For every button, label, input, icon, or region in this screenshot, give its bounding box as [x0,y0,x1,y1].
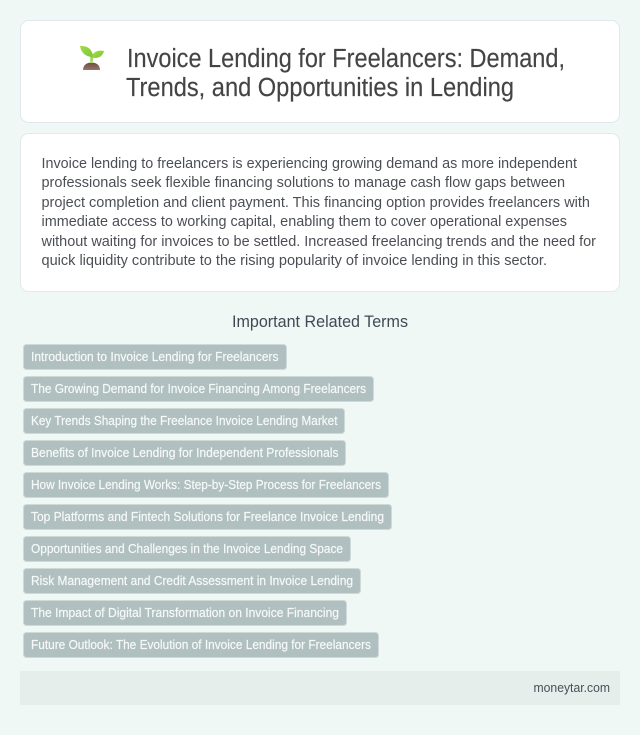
title: Invoice Lending for Freelancers: Demand, [127,45,565,73]
term 7: Opportunities and Challenges in the Invoice Lending Space [31,542,343,556]
term 2 [24,376,374,402]
term 6: Top Platforms and Fintech Solutions for Freelance Invoice Lending [31,510,384,524]
panel: intro paragraph [20,134,620,292]
panel: intro paragraph: quick liquidity contribute to the rising popularity of invoice lending in this sector. [42,253,547,269]
panel: intro paragraph: immediate access to working capital, enabling them to cover operational expenses [42,214,567,230]
term 6 [24,504,392,530]
icon: sprout [80,46,104,70]
term 2: The Growing Demand for Invoice Financing Among Freelancers [31,382,366,396]
footer bar [20,671,620,705]
term 8 [24,568,360,594]
panel: intro paragraph: Invoice lending to freelancers is experiencing growing demand as more independent [42,156,577,172]
heading: important related terms: Important Related Terms [232,313,408,331]
term 1 [24,344,286,370]
term 4 [24,440,346,466]
term 4: Benefits of Invoice Lending for Independent Professionals [31,446,338,460]
list of related terms [24,344,392,658]
term 5: How Invoice Lending Works: Step-by-Step Process for Freelancers [31,478,381,492]
panel: intro paragraph: professionals seek flexible financing solutions to manage cash flow gaps between [42,175,565,191]
term 10: Future Outlook: The Evolution of Invoice Lending for Freelancers [31,638,371,652]
term 5 [24,472,388,498]
title: Trends, and Opportunities in Lending [126,74,514,102]
panel: header [20,20,620,122]
panel: intro paragraph: project completion and client payment. This financing option provides freelancers with [42,195,590,211]
term 8: Risk Management and Credit Assessment in Invoice Lending [31,574,353,588]
term 9: The Impact of Digital Transformation on Invoice Financing [31,606,339,620]
panel: intro paragraph: without waiting for invoices to be settled. Increased freelancing trends and the need for [41,234,596,250]
term 3 [24,408,344,434]
term 9 [24,600,346,626]
footer bar: moneytar.com [534,681,610,695]
term 3: Key Trends Shaping the Freelance Invoice Lending Market [31,414,338,428]
title [126,45,565,102]
term 1: Introduction to Invoice Lending for Freelancers [31,350,278,364]
term 7 [24,536,350,562]
term 10 [24,632,378,658]
